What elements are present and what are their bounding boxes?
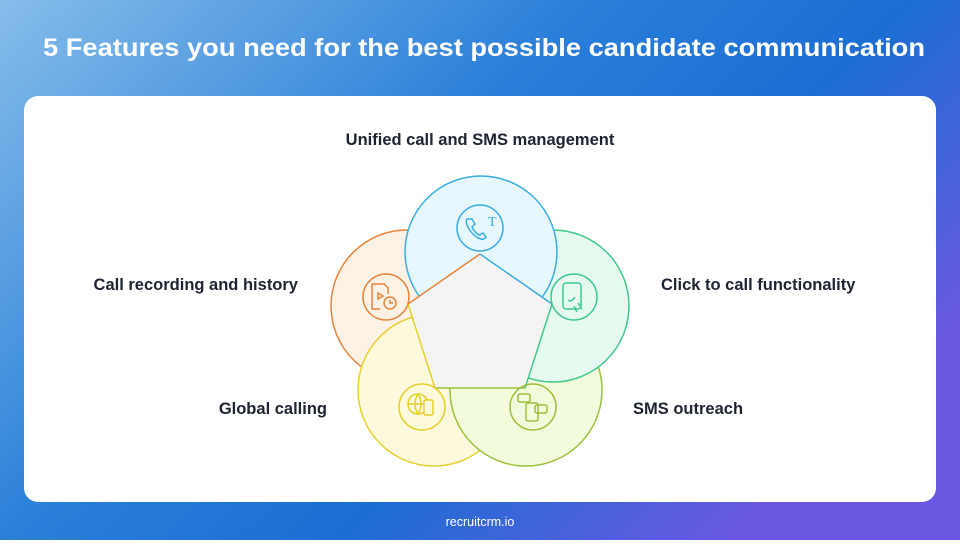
diagram — [331, 176, 629, 466]
circle: green — [477, 230, 629, 382]
pentagon — [408, 254, 552, 388]
icon: click to call — [551, 274, 597, 320]
label: call recording: Call recording and history — [94, 276, 299, 294]
icon: sms outreach — [510, 384, 556, 430]
icon: phone with T — [457, 205, 503, 251]
circle: orange — [331, 230, 483, 382]
icon: call recording — [363, 274, 409, 320]
label: global calling: Global calling — [219, 400, 327, 418]
icon: phone with T: T — [488, 215, 497, 230]
circle: blue — [405, 176, 557, 328]
footer: recruitcrm.io — [446, 515, 514, 529]
label: SMS outreach: SMS outreach — [633, 400, 743, 418]
white card panel — [24, 96, 936, 502]
title: 5 Features you need for the best possible candidate communication — [43, 34, 925, 62]
label: unified call and SMS: Unified call and SMS management — [346, 131, 615, 149]
label: click to call: Click to call functionality — [661, 276, 856, 294]
circle: lime — [450, 314, 602, 466]
icon: global calling — [399, 384, 445, 430]
circle: yellow — [358, 314, 510, 466]
